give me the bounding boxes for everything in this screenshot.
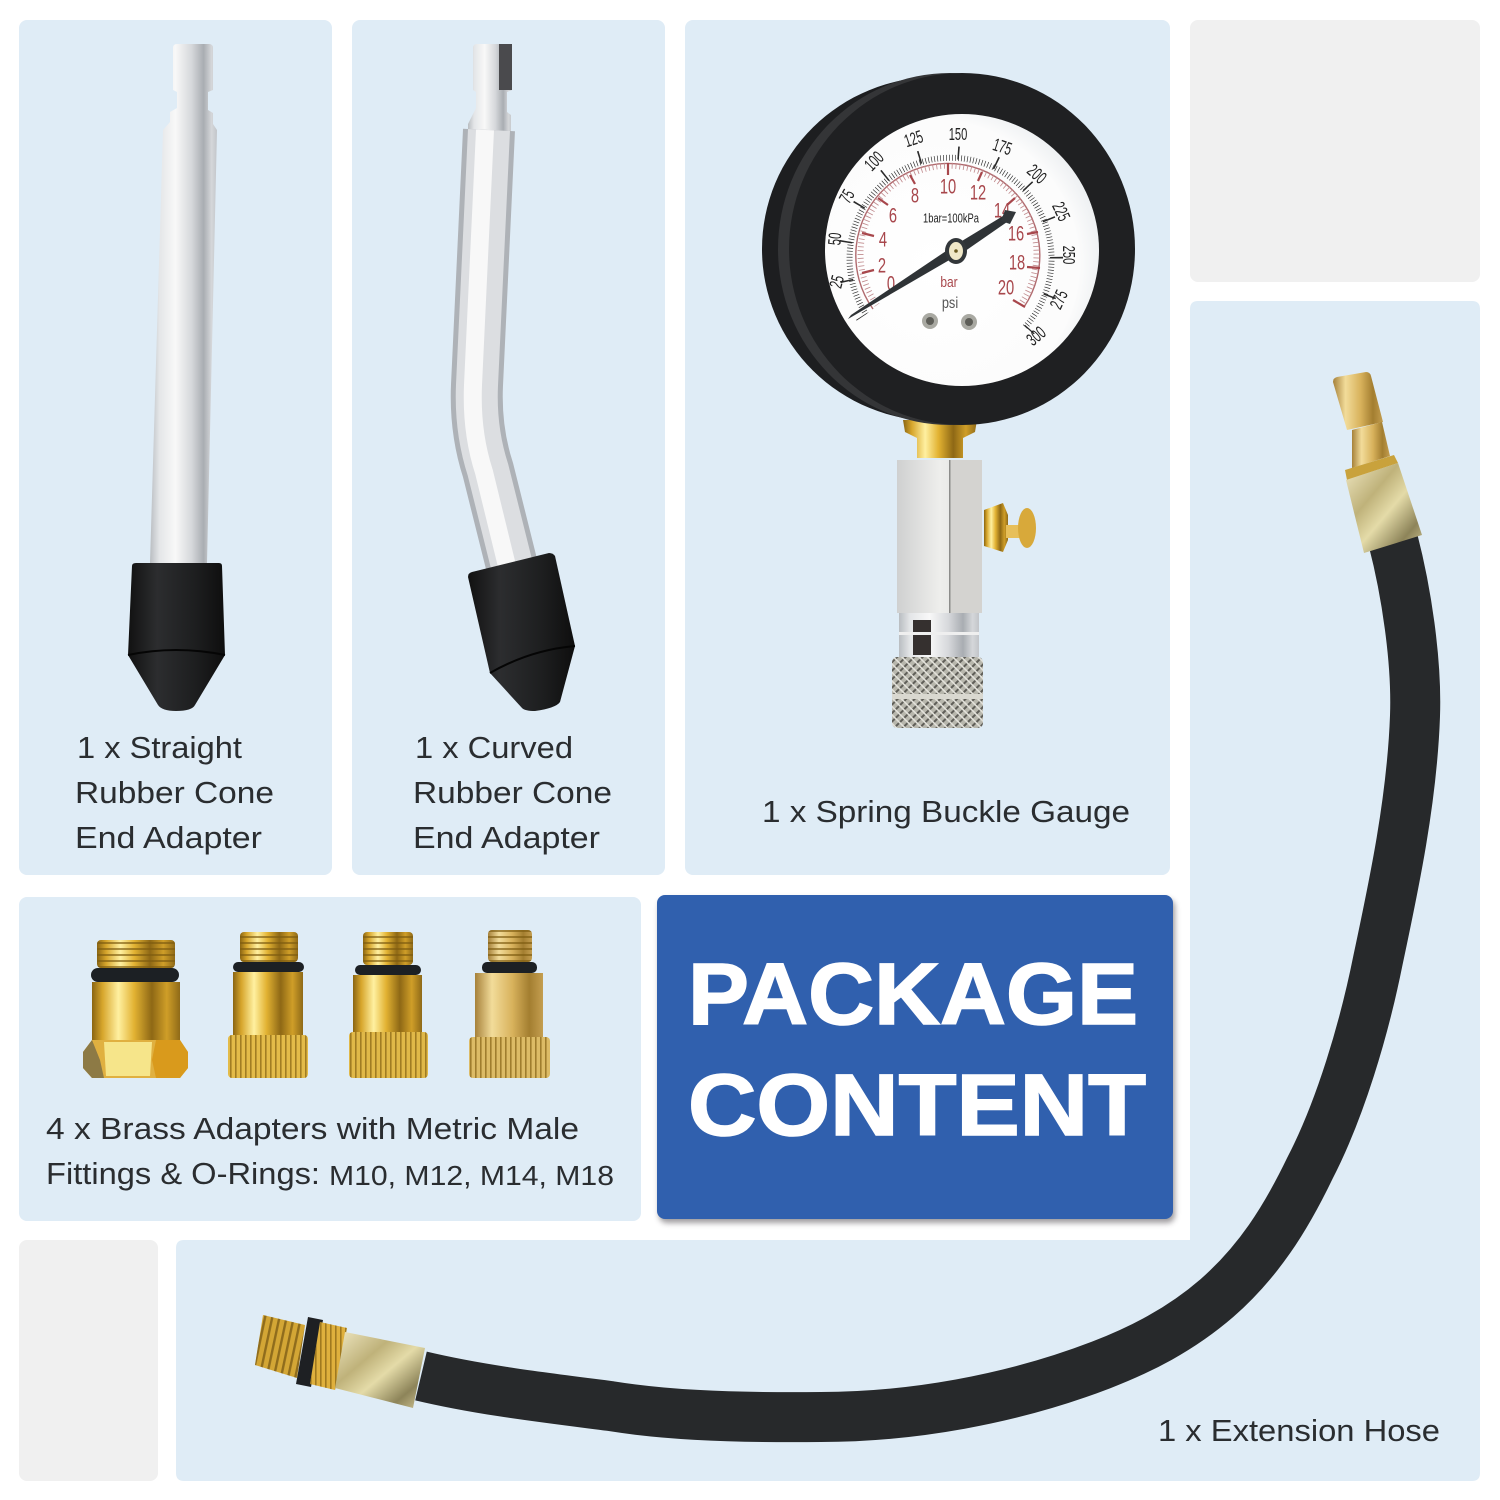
bar scale labels — [878, 175, 1025, 313]
label: gauge: 1 x Spring Buckle Gauge — [762, 794, 1130, 829]
bar scale labels: 20 — [998, 276, 1014, 299]
title: CONTENT — [688, 1057, 1146, 1154]
icon: gauge rubber case — [762, 73, 1135, 425]
psi scale labels: 225 — [1047, 199, 1074, 224]
icon: hose — [421, 540, 1415, 1417]
psi scale labels — [825, 124, 1079, 350]
icon: straight rubber cone adapter — [128, 44, 225, 711]
bar scale labels: 0 — [887, 272, 895, 295]
panel: blank top right — [1190, 20, 1480, 282]
bar scale labels: 18 — [1009, 251, 1025, 274]
bar scale labels: 2 — [878, 254, 886, 277]
bar scale labels: 1bar=100kPa — [923, 212, 980, 226]
psi scale labels: 25 — [826, 273, 849, 290]
title: PACKAGE — [688, 946, 1138, 1043]
panel: gauge — [685, 20, 1170, 875]
panel: brass adapters — [19, 897, 641, 1221]
psi scale labels: 175 — [990, 135, 1014, 160]
label: brass adapters: 4 x Brass Adapters with Metric Male — [46, 1111, 579, 1146]
bar scale labels: 8 — [911, 184, 919, 207]
bar scale labels: 6 — [889, 204, 897, 227]
psi scale labels: 275 — [1046, 287, 1073, 312]
bar scale labels: 16 — [1008, 222, 1024, 245]
label: hose: 1 x Extension Hose — [1158, 1413, 1440, 1448]
label: straight adapter: 1 x Straight — [77, 730, 242, 765]
psi scale labels: 125 — [902, 127, 926, 152]
psi scale labels: 50 — [825, 232, 846, 246]
label: curved adapter — [413, 730, 612, 855]
bar scale labels: 4 — [879, 228, 887, 251]
icon: hose bottom brass fitting — [255, 1315, 425, 1408]
icon: pressure gauge stem — [892, 420, 1036, 728]
panel: blank bottom left — [19, 1240, 158, 1481]
psi scale labels: 100 — [861, 148, 888, 175]
icon: hose top brass fitting — [1333, 372, 1422, 553]
psi scale labels: 150 — [949, 124, 967, 145]
icon: gauge dial face — [825, 114, 1099, 386]
icon: brass adapter M18 — [83, 940, 188, 1078]
label: brass adapters — [46, 1111, 614, 1191]
psi scale labels: 200 — [1023, 161, 1050, 188]
icon: brass adapter M10 — [469, 930, 550, 1078]
psi scale labels: 250 — [1058, 246, 1079, 264]
bar scale labels: psi — [942, 295, 958, 313]
icon: gauge needle — [848, 210, 1016, 319]
label: curved adapter: End Adapter — [413, 820, 600, 855]
label: straight adapter: Rubber Cone — [75, 775, 274, 810]
icon: dial screws — [922, 313, 977, 330]
title panel: package content — [657, 895, 1175, 1223]
label: brass adapters: Fittings & O-Rings: — [46, 1156, 320, 1191]
bar scale labels: 14 — [994, 199, 1010, 222]
psi scale labels: 75 — [835, 186, 859, 207]
bar scale labels: bar — [940, 274, 958, 290]
title — [688, 946, 1146, 1154]
bar scale labels: 12 — [970, 181, 986, 204]
panel: curved adapter — [352, 20, 665, 875]
label: curved adapter: Rubber Cone — [413, 775, 612, 810]
icon: brass adapter M12 — [349, 932, 428, 1078]
panel: extension hose — [176, 301, 1480, 1481]
psi scale labels: 300 — [1023, 323, 1050, 350]
bar scale labels: 10 — [940, 175, 956, 198]
label: straight adapter: End Adapter — [75, 820, 262, 855]
label: straight adapter — [75, 730, 274, 855]
icon: curved rubber cone adapter — [468, 44, 575, 711]
label: brass adapters: M10, M12, M14, M18 — [329, 1160, 614, 1191]
label: curved adapter: 1 x Curved — [415, 730, 573, 765]
icon: brass adapter M14 — [228, 932, 308, 1078]
panel: straight adapter — [19, 20, 332, 875]
